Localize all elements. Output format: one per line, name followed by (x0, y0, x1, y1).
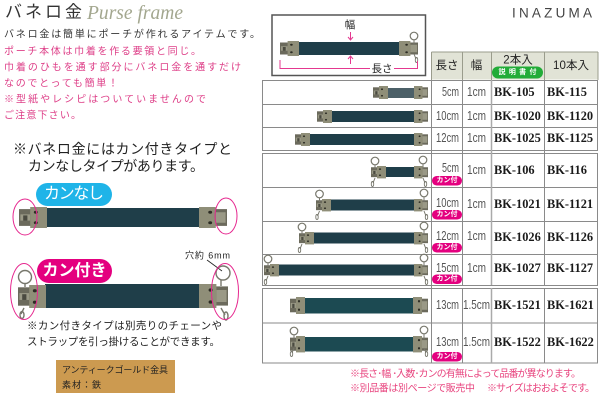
material box: 素材：鉄 (62, 379, 101, 390)
product row BK-1521: 13cm (436, 298, 459, 312)
product row BK-106: BK-106 (494, 163, 535, 177)
highlight ellipses without rings (13, 198, 237, 235)
intro text block (4, 28, 260, 122)
dimension diagram: 長さ (372, 63, 392, 75)
product row BK-1026: BK-1026 (494, 230, 541, 244)
product row BK-1522: カン付 (436, 351, 458, 360)
product row BK-1025 (295, 131, 593, 146)
table group: 1.5cm (262, 285, 598, 363)
product row BK-1021: 10cm (436, 196, 459, 210)
product row BK-1026: カン付 (436, 242, 458, 251)
product row BK-1027: BK-1027 (494, 261, 541, 275)
hole size callout: 穴約 6mm (185, 250, 230, 260)
product row BK-1020 (317, 109, 593, 123)
label: kan tsuki: カン付き (42, 262, 106, 280)
title: バネロ金 (5, 2, 82, 22)
product row BK-1025: BK-1125 (547, 131, 593, 145)
product row BK-1522: 1.5cm (463, 335, 490, 349)
product row BK-106: 1cm (467, 163, 486, 177)
footnotes: ※長さ･幅 ･入数･カンの有無によって品番が異なります。 (350, 367, 581, 380)
material box (56, 360, 175, 393)
frame without rings (19, 207, 227, 228)
product row BK-105 (373, 85, 587, 99)
product row BK-1027: BK-1127 (547, 261, 593, 275)
product row BK-1521: BK-1521 (494, 298, 541, 312)
note heading (13, 141, 232, 174)
frame with rings (18, 266, 230, 320)
table group: with rings 1cm (262, 150, 598, 286)
footnotes (350, 367, 595, 394)
table header: 10本入 (553, 58, 590, 72)
product row BK-1021 (316, 189, 593, 220)
product row BK-1027: 15cm (436, 261, 459, 275)
product row BK-105: 5cm (442, 85, 459, 99)
product row BK-105: BK-115 (547, 85, 587, 99)
product row BK-1020: BK-1120 (547, 109, 593, 123)
product row BK-1025: 12cm (436, 131, 459, 145)
title (5, 2, 183, 24)
product row BK-1020: 1cm (467, 109, 486, 123)
intro text block: なのでとっても簡単！ (4, 76, 118, 90)
product row BK-1021: 1cm (467, 197, 486, 211)
table group: no rings 1cm (262, 80, 598, 150)
product row BK-1521 (290, 297, 594, 314)
ring note text: ※カン付きタイプは別売りのチェーンや (27, 319, 222, 332)
product row BK-1020: 10cm (436, 109, 459, 123)
footnotes: ※別品番は別ページで販売中 (350, 382, 475, 394)
product row BK-1026: 1cm (467, 229, 486, 243)
product row BK-106: BK-116 (547, 163, 587, 177)
label: kan nashi (36, 183, 112, 206)
table header: 幅 (471, 59, 482, 72)
product row BK-1027 (264, 254, 593, 284)
product row BK-1026 (298, 222, 593, 252)
product row BK-1020: BK-1020 (494, 109, 541, 123)
label: kan nashi: カンなし (44, 184, 104, 202)
product row BK-106: 5cm (442, 161, 459, 175)
brand name: INAZUMA (512, 6, 592, 20)
product row BK-1521: 1.5cm (463, 298, 490, 312)
product row BK-105: 1cm (467, 85, 486, 99)
product row BK-1026: 12cm (436, 229, 459, 243)
label: kan tsuki (37, 259, 112, 283)
product row BK-1026: BK-1126 (547, 230, 593, 244)
product row BK-1027: カン付 (436, 274, 458, 283)
product row BK-1522 (290, 326, 594, 362)
product row BK-1021: BK-1121 (547, 197, 593, 211)
product row BK-1521: BK-1621 (547, 298, 594, 312)
intro text block: 巾着のひもを通す部分にバネロ金を通すだけ (4, 60, 241, 74)
dimension diagram: 幅 (345, 18, 355, 31)
title: Purse frame (86, 3, 183, 24)
table header: 説明書付 (498, 67, 536, 76)
highlight ellipses with rings (10, 264, 238, 320)
note heading: ※バネロ金にはカン付きタイプと (13, 141, 232, 157)
product row BK-106: カン付 (436, 175, 458, 184)
footnotes: ※サイズはおおよそです。 (487, 382, 595, 394)
intro text block: ポーチ本体は巾着を作る要領と同じ。 (4, 44, 201, 58)
product row BK-1522: BK-1522 (494, 335, 541, 349)
product row BK-105: BK-105 (494, 85, 535, 99)
intro text block: ※型紙やレシピはついていませんので (4, 92, 206, 106)
table header: 長さ (436, 59, 458, 72)
ring note text: ストラップを引っ掛けることができます。 (27, 335, 220, 348)
product row BK-106 (371, 156, 587, 186)
intro text block: ご注意下さい。 (4, 108, 81, 122)
product row BK-1522: 13cm (436, 335, 459, 349)
hole size callout (185, 250, 230, 271)
note heading: カンなしタイプがあります。 (28, 158, 204, 174)
product row BK-1522: BK-1622 (547, 335, 594, 349)
ring note text (27, 319, 222, 348)
table header (432, 52, 598, 80)
dimension diagram (272, 15, 426, 76)
product row BK-1021: カン付 (436, 209, 458, 218)
product row BK-1025: 1cm (467, 131, 486, 145)
material box: アンティークゴールド金具 (62, 364, 168, 375)
product row BK-1027: 1cm (467, 261, 486, 275)
table header: 2本入 (503, 52, 533, 66)
product row BK-1021: BK-1021 (494, 197, 541, 211)
intro text block: バネロ金は簡単にポーチが作れるアイテムです。 (4, 28, 260, 40)
product row BK-1025: BK-1025 (494, 131, 541, 145)
